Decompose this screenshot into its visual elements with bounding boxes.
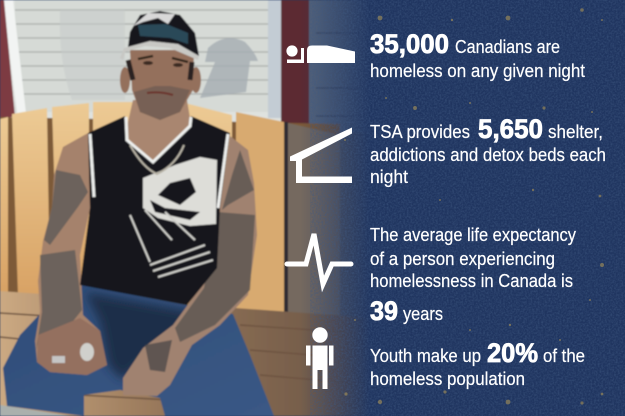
- jeans: [3, 284, 274, 416]
- icon: bed: [286, 45, 355, 63]
- stat: life expectancy 39 years: of a person experiencing: [370, 248, 555, 269]
- stat: youth 20%: homeless population: [370, 368, 525, 389]
- right arm: [123, 136, 257, 396]
- stat: life expectancy 39 years: homelessness in Canada is: [370, 270, 573, 291]
- photo: man seated on a wooden bench: [0, 0, 374, 416]
- stat: 35,000 Canadians: homeless on any given night: [370, 60, 585, 81]
- curb: [0, 405, 70, 416]
- stubble and facial features: [128, 56, 192, 120]
- stat: youth 20%: [370, 338, 585, 389]
- stat: life expectancy 39 years: 39: [370, 296, 398, 326]
- stat: 35,000 Canadians: Canadians are: [455, 36, 560, 57]
- stat: TSA 5,650 beds: night: [370, 166, 408, 187]
- stat: youth 20%: Youth make up: [370, 345, 481, 366]
- stat: TSA 5,650 beds: 5,650: [478, 114, 543, 144]
- stat: TSA 5,650 beds: TSA provides: [370, 121, 470, 142]
- face and ears: [120, 50, 201, 120]
- panel texture: [310, 0, 625, 416]
- icon: house: [290, 128, 352, 183]
- stat: youth 20%: of the: [543, 345, 585, 366]
- jeans shadow: [85, 292, 205, 380]
- shirt graphic: [143, 157, 217, 226]
- chest and neck: [125, 100, 192, 168]
- shirt stripes: [130, 210, 213, 277]
- necklace: [130, 145, 184, 174]
- stat: life expectancy 39 years: [370, 224, 577, 326]
- stat: life expectancy 39 years: The average life expectancy: [370, 224, 577, 245]
- cap with sunglasses: [120, 11, 199, 60]
- stat: TSA 5,650 beds: shelter,: [548, 121, 603, 142]
- stat: life expectancy 39 years: years: [403, 303, 443, 324]
- bench seat: [0, 291, 374, 416]
- maroon wall sections: [0, 0, 374, 135]
- left arm: [35, 133, 107, 375]
- black sleeveless shirt: [80, 116, 230, 305]
- navy panel: [370, 0, 625, 416]
- navy panel fade over photo: [300, 0, 370, 416]
- stat: youth 20%: 20%: [487, 338, 538, 368]
- left arm tattoos: [36, 170, 88, 350]
- left hand with rings: [37, 318, 107, 375]
- window with blinds: [0, 0, 282, 125]
- stat: 35,000 Canadians: [370, 29, 585, 81]
- icon: person: [306, 327, 334, 389]
- shirt white trim: [90, 117, 228, 208]
- panel gold speckles: [344, 8, 604, 405]
- right arm tattoos: [175, 150, 255, 342]
- stat: 35,000 Canadians: 35,000: [370, 29, 449, 59]
- bench backrest planks: [0, 102, 374, 332]
- icon: heartbeat pulse: [287, 234, 351, 284]
- stat: TSA 5,650 beds: [370, 114, 606, 187]
- stat: TSA 5,650 beds: addictions and detox beds each: [370, 144, 606, 165]
